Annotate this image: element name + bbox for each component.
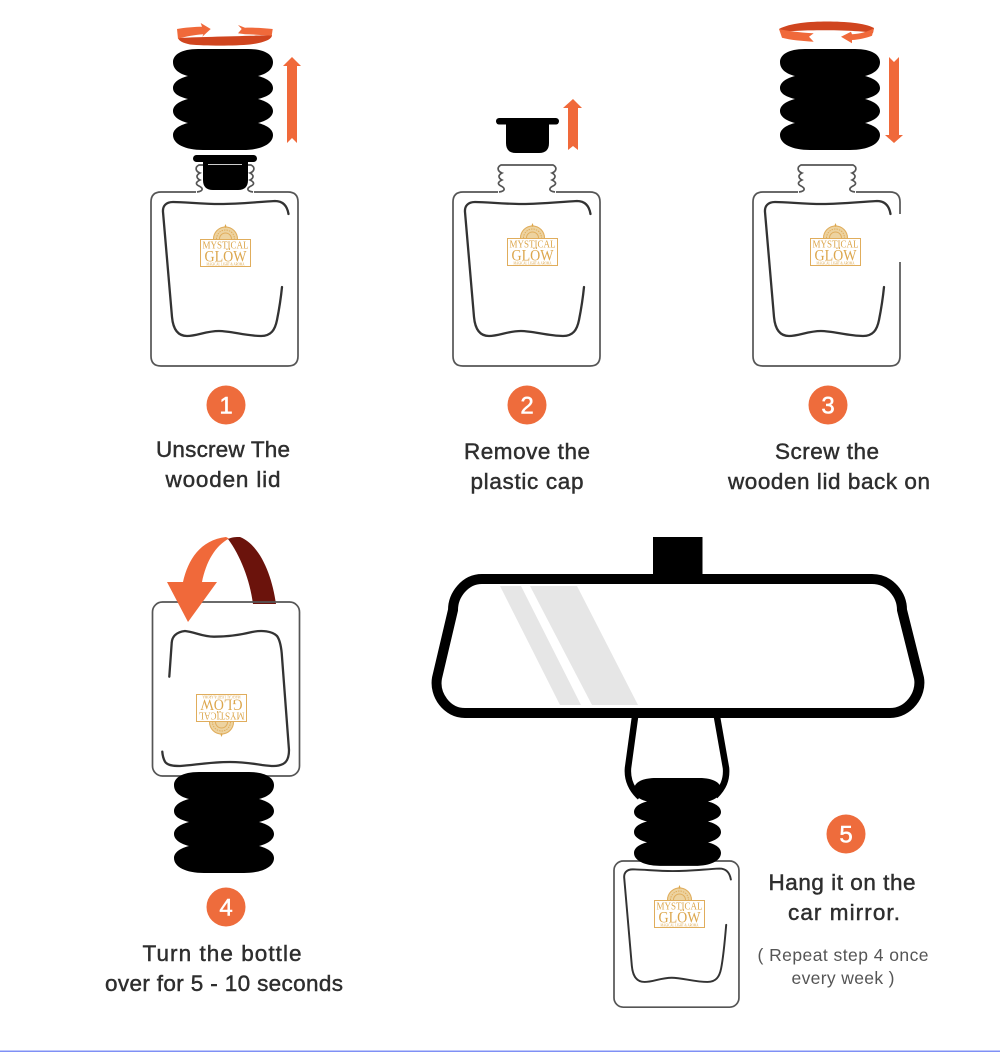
icon: curved arrow back: [228, 537, 276, 604]
bottle: [753, 165, 903, 366]
logo: GLÖW: [814, 246, 857, 264]
logo: [654, 885, 704, 928]
wooden lid: [174, 772, 274, 873]
step 3 badge: 3: [821, 392, 835, 420]
bottle: [151, 165, 298, 366]
step 5 badge: 5: [839, 822, 853, 848]
icon: curved arrow front: [167, 537, 229, 622]
logo: MYSTICAL: [656, 902, 702, 912]
icon: up arrow: [283, 57, 301, 143]
step 1 caption: [156, 437, 290, 492]
step 4 caption: over for 5 - 10 seconds: [105, 971, 343, 996]
rear-view mirror frame: [437, 579, 919, 713]
step 5 note: ( Repeat step 4 once: [758, 945, 928, 965]
logo: [810, 223, 860, 266]
logo: GLÖW: [204, 247, 247, 265]
logo: GLÖW: [658, 908, 701, 926]
step 2 caption: [464, 439, 590, 494]
step 5 caption: [768, 870, 916, 925]
wooden lid: [173, 49, 273, 150]
step 4 caption: Turn the bottle: [142, 941, 302, 966]
step 5 note: every week ): [792, 968, 894, 988]
mirror mount: [653, 537, 702, 582]
wooden lid: [780, 49, 880, 150]
logo: [508, 223, 558, 266]
logo: MAGICAL LIGHT & AROMA: [514, 260, 552, 266]
plastic cap: [193, 155, 257, 190]
icon: rotation arrow: [779, 22, 874, 43]
logo: MAGICAL LIGHT & AROMA: [206, 262, 245, 266]
step 4 caption: [105, 941, 343, 996]
logo: GLÖW: [512, 246, 554, 264]
logo: [200, 224, 250, 266]
step 2: remove plastic cap illustration: [453, 99, 600, 366]
step 1: unscrew wooden lid illustration: [151, 23, 301, 366]
step 2 badge: 2: [520, 392, 534, 420]
bottle: [453, 165, 600, 366]
step 3 badge: [808, 386, 848, 424]
step 3 caption: wooden lid back on: [727, 469, 930, 494]
bottle: [152, 602, 300, 776]
step 4: inverted bottle illustration: [152, 537, 300, 873]
logo: MAGICAL LIGHT & AROMA: [660, 922, 699, 928]
logo: MYSTICAL: [812, 240, 858, 250]
step 5 caption: Hang it on the: [768, 870, 916, 895]
logo: MAGICAL LIGHT & AROMA: [816, 260, 855, 266]
mirror glare: [500, 586, 638, 705]
step 1 badge: [206, 386, 246, 424]
icon: up arrow: [563, 99, 582, 150]
icon: down arrow: [885, 57, 903, 143]
step 5 note: [758, 945, 928, 988]
step 5 badge: [826, 814, 866, 854]
plastic cap: [496, 118, 559, 153]
logo: MYSTICAL: [510, 240, 556, 250]
step 4 badge: 4: [219, 894, 233, 922]
step 1 caption: Unscrew The: [156, 437, 290, 462]
bottle: [614, 861, 739, 1007]
step 3 caption: [727, 439, 930, 494]
icon: rotation arrow: [177, 23, 273, 46]
logo: MYSTICAL: [198, 710, 244, 720]
logo: GLÖW: [200, 696, 242, 714]
step 4 badge: [206, 888, 246, 926]
logo: [196, 694, 246, 737]
hanging strings: [628, 717, 726, 797]
step 2 badge: [508, 386, 546, 424]
step 1 caption: wooden lid: [164, 467, 280, 492]
step 3: screw lid back on illustration: [753, 22, 903, 366]
step 3 caption: Screw the: [775, 439, 879, 464]
step 1 badge: 1: [219, 392, 233, 420]
logo: MAGICAL LIGHT & AROMA: [202, 694, 240, 700]
step 5: car mirror illustration: [437, 537, 919, 1007]
logo: MYSTICAL: [202, 240, 248, 252]
wooden lid: [634, 778, 721, 866]
step 2 caption: Remove the: [464, 439, 590, 464]
step 2 caption: plastic cap: [470, 469, 584, 494]
step 5 caption: car mirror.: [788, 900, 900, 925]
